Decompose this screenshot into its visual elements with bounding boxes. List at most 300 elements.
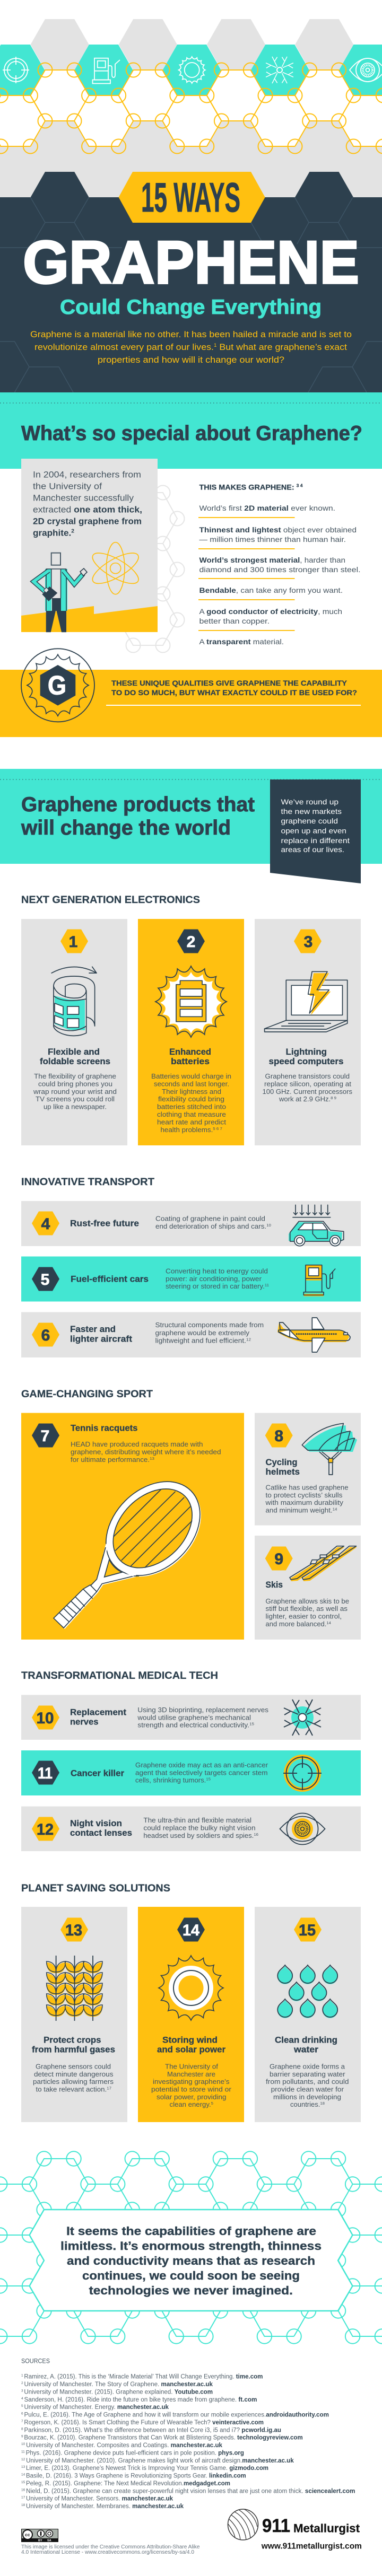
source list: medgadget.com [184, 2481, 230, 2487]
source list: Limer, E. (2013). Graphene’s Newest Trick is Improving Your Tennis Game. [26, 2465, 229, 2472]
card 3: lightning computers [255, 919, 361, 1145]
intro text: 1 [214, 343, 216, 348]
card 9: skis [255, 1536, 361, 1640]
callout text: THESE UNIQUE QUALITIES GIVE GRAPHENE THE CAPABILITY [111, 679, 347, 687]
card body: 100 GHz. Current processors [262, 1088, 352, 1096]
badge 8 [265, 1423, 293, 1448]
card body: 14 [333, 1507, 337, 1512]
badge 5: 5 [41, 1271, 49, 1289]
card 14: storing power [138, 1907, 244, 2122]
card body: wrap round your wrist and [33, 1088, 117, 1096]
source list: 11 [21, 2450, 26, 2454]
discovery text: 2 [71, 528, 74, 535]
card title: Skis [265, 1580, 283, 1590]
card body: countries. [290, 2101, 319, 2108]
card title [32, 2036, 115, 2055]
source list: manchester.ac.uk [171, 2442, 223, 2449]
icon: cc by-sa: SA [47, 2539, 51, 2542]
badge 3: 3 [304, 933, 312, 951]
badge 2 [177, 929, 205, 953]
icon: scientist figure [33, 553, 87, 632]
card body: lighter, easier to control, [265, 1613, 342, 1620]
row body: 16 [254, 1832, 258, 1837]
badge 4 [32, 1211, 59, 1236]
card body: potential to store wind or [151, 2086, 231, 2093]
badge 11: 11 [38, 1765, 53, 1782]
row body [155, 1215, 271, 1230]
row title: Replacement [70, 1708, 127, 1718]
card title: Enhanced [169, 1047, 211, 1057]
source list: University of Manchester. Composites and Coatings. [26, 2442, 171, 2449]
row title: nerves [70, 1717, 99, 1727]
icon: roll-up screen [51, 967, 97, 1036]
row 5: fuel-efficient cars [21, 1257, 361, 1301]
card title [275, 2036, 337, 2055]
icon: water drops [277, 1965, 337, 2018]
source list: 4 [21, 2397, 24, 2400]
card body [265, 1484, 348, 1514]
badge 10 [32, 1705, 59, 1730]
badge 14 [177, 1917, 205, 1942]
card body: clean energy. [170, 2101, 209, 2108]
list items: World’s strongest material , harder than [199, 556, 345, 564]
card title: from harmful gases [32, 2045, 115, 2055]
source list: sciencealert.com [305, 2488, 355, 2494]
card body: millions in developing [273, 2093, 341, 2101]
card body: Graphene allows skis to be [265, 1598, 349, 1605]
wordmark: Metallurgist [293, 2522, 360, 2535]
card title: water [293, 2045, 319, 2055]
row body: 10 [266, 1223, 271, 1228]
card body: batteries stitched into [157, 1103, 226, 1110]
list items: — million times thinner than human hair. [199, 535, 346, 544]
card body: Graphene sensors could [36, 2063, 111, 2071]
source list: Basile, D. (2016). 3 Ways Graphene is Revolutionizing Sports Gear. [26, 2473, 209, 2479]
wordmark [262, 2516, 360, 2536]
row body: headset used by soldiers and spies. [143, 1832, 250, 1839]
card title [157, 2036, 226, 2055]
card title [268, 1047, 344, 1066]
card body: 5 [211, 2101, 213, 2106]
badge 7 [32, 1423, 59, 1448]
source list: Youtube.com [175, 2389, 213, 2395]
badge 9 [265, 1546, 293, 1571]
card 13: protect crops [21, 1907, 127, 2122]
card body: for ultimate performance. [71, 1456, 145, 1464]
source list: 5 [21, 2404, 24, 2408]
card title [169, 1047, 211, 1066]
source list: University of Manchester. Energy. [24, 2404, 117, 2411]
card body: and minimum weight. [265, 1507, 329, 1514]
row body: lightweight and fuel efficient. [155, 1337, 239, 1345]
source list: 9 [21, 2435, 24, 2439]
row title: lighter aircraft [70, 1335, 133, 1344]
card body: 13 [150, 1456, 154, 1461]
intro text: properties and how will it change our world? [98, 355, 284, 365]
source list: University of Manchester. (2015). Graphene explained. [24, 2389, 175, 2395]
row title: contact lenses [70, 1828, 132, 1838]
icon: neuron [284, 1699, 321, 1736]
source list: manchester.ac.uk [242, 2458, 294, 2464]
badge 8: 8 [274, 1427, 283, 1445]
source list: manchester.ac.uk [132, 2503, 184, 2510]
icon: wheat [47, 1956, 102, 2021]
heading: Graphene products that [21, 793, 255, 816]
section heading: electronics: NEXT GENERATION ELECTRONICS [21, 894, 200, 906]
badge 15: 15 [299, 1922, 316, 1939]
source list: linkedin.com [209, 2473, 246, 2479]
badge 7: 7 [41, 1427, 49, 1445]
icon: eye [280, 1813, 325, 1844]
discovery text: the University of [33, 481, 102, 491]
decorative grey lattice [118, 486, 185, 652]
heading [21, 793, 255, 839]
icon: fuel pump [92, 58, 120, 84]
panel: products header [0, 769, 382, 883]
icon: laptop with bolt [265, 971, 348, 1032]
badge 3 [294, 929, 322, 953]
source list: Parkinson, D. (2015). What’s the difference between an Intel Core i3, i5 and i7? [24, 2427, 241, 2433]
list items: A good conductor of electricity , much [199, 607, 342, 616]
row title: Night vision [70, 1819, 122, 1828]
icon: aeroplane [277, 1318, 350, 1352]
badge 6 [32, 1322, 59, 1347]
card title: helmets [265, 1467, 300, 1477]
intro box: the new markets [281, 807, 342, 816]
row body: steering or stored in car battery. [166, 1283, 259, 1290]
card body [33, 2063, 114, 2093]
badge 9: 9 [274, 1550, 283, 1568]
row body: graphene would be extremely [155, 1329, 250, 1337]
row body: Converting heat to energy could [166, 1267, 268, 1275]
source list: 3 [21, 2389, 24, 2393]
badge 10: 10 [36, 1710, 54, 1727]
website: www.911metallurgist.com [261, 2542, 362, 2551]
icon: skis [290, 1546, 357, 1581]
closing text: continues, we could soon be seeing [82, 2269, 300, 2282]
discovery text: graphite. [33, 528, 70, 538]
card body: Catlike has used graphene [265, 1484, 348, 1492]
source list: University of Manchester. The Story of Graphene. [24, 2381, 161, 2388]
source list: ft.com [238, 2397, 257, 2403]
closing text: It seems the capabilities of graphene are [66, 2224, 316, 2238]
card 15: clean water [255, 1907, 361, 2122]
card title: Clean drinking [275, 2036, 337, 2045]
licence text: This image is licensed under the Creative Commons Attribution-Share Alike [21, 2544, 200, 2550]
row body [166, 1267, 269, 1290]
section heading: planet: PLANET SAVING SOLUTIONS [21, 1882, 170, 1894]
badge 13: 13 [65, 1922, 82, 1939]
card body: 5 6 7 [213, 1126, 222, 1131]
icon: logo globe [228, 2509, 258, 2540]
intro box: areas of our lives. [281, 845, 344, 854]
card body: to protect cyclists’ skulls [265, 1492, 343, 1499]
badge 2: 2 [187, 933, 195, 951]
callout text [111, 679, 357, 697]
card body: provide clean water for [271, 2086, 344, 2093]
discovery text: 2D crystal graphene from [33, 516, 142, 526]
badge 14: 14 [183, 1922, 199, 1939]
card body: health problems. [160, 1126, 210, 1134]
source list: 14 [21, 2473, 26, 2477]
card body: Graphene oxide forms a [270, 2063, 345, 2071]
licence text: 4.0 International License - www.creativecommons.org/licenses/by-sa/4.0 [21, 2549, 195, 2555]
badge 13 [60, 1917, 88, 1942]
intro text [30, 330, 352, 365]
source list: Phys. (2016). Graphene device puts fuel-efficient cars in pole position. [26, 2450, 218, 2456]
row 6: aircraft [21, 1312, 361, 1357]
source list: 18 [21, 2503, 26, 2507]
card body: 8 9 [331, 1096, 336, 1100]
source list: pcworld.ig.au [241, 2427, 281, 2433]
row title: Fuel-efficient cars [71, 1275, 149, 1284]
source list: Peleg, R. (2015). Graphene: The Next Medical Revolution. [26, 2481, 184, 2487]
card body: up like a newspaper. [44, 1103, 107, 1110]
source list: 13 [21, 2465, 26, 2469]
row body: could replace the bulky night vision [143, 1824, 256, 1832]
source list: manchester.ac.uk [122, 2496, 173, 2502]
badge 6: 6 [41, 1327, 50, 1344]
badge 12 [32, 1817, 59, 1841]
source list: Bourzac, K. (2010). Graphene Transistors that Can Work at Blistering Speeds. [24, 2435, 237, 2441]
source list: 15 [21, 2481, 26, 2484]
icon: sun burst [179, 57, 205, 83]
intro box [270, 779, 361, 883]
card body: 14 [326, 1620, 331, 1625]
row 10: replacement nerves [21, 1695, 361, 1740]
badge: 15 ways [119, 172, 265, 223]
card body: with maximum durability [265, 1499, 344, 1506]
card body: detect minute dangerous [34, 2071, 114, 2078]
source list [21, 2374, 355, 2510]
intro text: revolutionize almost every part of our lives. [34, 343, 201, 352]
section heading: medical: TRANSFORMATIONAL MEDICAL TECH [21, 1670, 218, 1681]
panel: what's so special header [0, 392, 382, 469]
badge 1 [60, 929, 88, 953]
source list: phys.org [218, 2450, 244, 2456]
icon: fuel pump [303, 1265, 335, 1296]
card body: solar power, providing [157, 2093, 226, 2101]
logo: 911 Metallurgist [228, 2509, 362, 2551]
card body: replace silicon, operating at [264, 1081, 352, 1088]
source list: 2 [21, 2381, 24, 2385]
source list: veinteractive.com [212, 2420, 264, 2426]
badge 15 [294, 1917, 322, 1942]
card body: investigating graphene’s [153, 2078, 229, 2086]
sources heading: SOURCES [21, 2359, 50, 2365]
list heading: THIS MAKES GRAPHENE: [199, 483, 289, 491]
closing text: limitless. It’s enormous strength, thinness [60, 2239, 322, 2253]
icon: tennis racquet [54, 1463, 220, 1629]
icon: battery burst [155, 966, 227, 1037]
row body: would utilise graphene’s mechanical [137, 1714, 251, 1721]
card body [151, 1073, 231, 1134]
row 11: cancer killer [21, 1750, 361, 1795]
badge 1: 1 [69, 933, 77, 951]
source list: Rogerson, K. (2016). Is Smart Clothing the Future of Wearable Tech? [24, 2420, 212, 2426]
row body [135, 1762, 268, 1784]
card body [71, 1441, 221, 1464]
card title [40, 1047, 110, 1066]
row body: strength and electrical conductivity. [137, 1722, 241, 1729]
icon: atom [89, 542, 143, 594]
source list: manchester.ac.uk [117, 2404, 169, 2411]
closing text: technologies we never imagined. [89, 2284, 293, 2297]
source list: Nield, D. (2015). Graphene can create super-powerful night vision lenses that are just one atom thick. [26, 2488, 305, 2494]
source list: gizmodo.com [229, 2465, 268, 2472]
card title: Tennis racquets [71, 1424, 137, 1433]
panel: title block [0, 172, 382, 392]
card title: Protect crops [44, 2036, 101, 2045]
card body: graphene, distributing weight where it’s needed [71, 1449, 221, 1456]
list items: better than copper. [199, 617, 270, 625]
row body: 12 [246, 1337, 251, 1342]
discovery text: In 2004, researchers from [33, 470, 141, 479]
source list: 17 [21, 2496, 26, 2500]
source list: 10 [21, 2442, 26, 2446]
card body: The University of [165, 2063, 219, 2071]
sources [21, 2359, 355, 2510]
icon: neuron [266, 57, 293, 83]
card body: to take relevant action. [36, 2086, 103, 2093]
source list: time.com [236, 2374, 263, 2380]
card title [265, 1458, 300, 1477]
row title [70, 1325, 133, 1344]
card body [266, 2063, 349, 2108]
heading: will change the world [21, 817, 231, 839]
wordmark: 911 [262, 2516, 290, 2536]
icon: target [3, 57, 29, 83]
card body [265, 1598, 349, 1628]
card title: Cycling [265, 1458, 297, 1467]
section heading: transport: INNOVATIVE TRANSPORT [21, 1176, 154, 1188]
panel: property list [198, 483, 361, 646]
card body: and more balanced. [265, 1620, 325, 1628]
row body: 11 [265, 1283, 269, 1287]
card body: HEAD have produced racquets made with [71, 1441, 203, 1448]
panel: closing statement on teal lattice [0, 2151, 382, 2344]
source list: 12 [21, 2458, 26, 2461]
card title: speed computers [268, 1057, 344, 1066]
icon: eye [350, 58, 382, 82]
card body: Batteries would charge in [151, 1073, 231, 1080]
row body [143, 1817, 258, 1839]
list items: Bendable , can take any form you want. [199, 586, 343, 594]
row body: end deterioration of ships and cars. [155, 1223, 260, 1230]
row 4: rust-free future [21, 1201, 361, 1246]
card title: Lightning [285, 1047, 327, 1057]
card title: Flexible and [48, 1047, 100, 1057]
row body: Graphene oxide may act as an anti-cancer [135, 1762, 268, 1769]
licence badge and text [21, 2529, 200, 2555]
icon: G badge [21, 649, 94, 722]
row body: Using 3D bioprinting, replacement nerves [137, 1706, 268, 1714]
card body: from pollutants, and could [266, 2078, 349, 2086]
icon: car under falling arrows [289, 1205, 344, 1246]
panel: unique qualities band [0, 649, 382, 737]
card 7: tennis racquets [21, 1413, 244, 1640]
card body [33, 1073, 117, 1110]
list heading: 3 4 [297, 483, 303, 488]
title: graphene: GRAPHENE [23, 229, 359, 296]
closing text [60, 2224, 322, 2297]
card body: particles allowing farmers [33, 2078, 114, 2086]
card body: could bring phones you [38, 1081, 112, 1088]
row title: Faster and [70, 1325, 116, 1334]
panel: 2004 discovery [21, 459, 158, 632]
list items: World’s first 2D material ever known. [199, 504, 335, 512]
intro text: Graphene is a material like no other. It has been hailed a miracle and is set to [30, 330, 352, 339]
list items: A transparent material. [199, 637, 284, 646]
badge 11 [32, 1760, 59, 1785]
discovery text: Manchester successfully [33, 493, 134, 503]
card title: batteries [171, 1057, 210, 1066]
card body: Graphene transistors could [265, 1073, 350, 1080]
row title [70, 1819, 132, 1838]
row title: Cancer killer [71, 1769, 125, 1778]
subtitle: Could Change Everything [60, 296, 322, 319]
icon: cc by-sa [21, 2529, 58, 2542]
icon: sun [159, 1956, 223, 2020]
row body: cells, shrinking tumors. [135, 1777, 203, 1784]
card body: Manchester are [167, 2071, 215, 2078]
row body: 15 [206, 1777, 211, 1782]
callout text: TO DO SO MUCH, BUT WHAT EXACTLY COULD IT BE USED FOR? [111, 689, 357, 697]
row body: power: air conditioning, power [166, 1275, 262, 1283]
card body: 18 [320, 2101, 325, 2106]
source list: 1 [21, 2374, 24, 2378]
heading: What’s so special about Graphene? [21, 422, 362, 445]
list items [199, 504, 361, 646]
closing text: and conductivity means that as research [67, 2254, 315, 2267]
card 8: cycling helmets [255, 1413, 361, 1526]
card body: heart rate and predict [157, 1119, 227, 1126]
hero: hexagon lattice banner with icons [0, 19, 382, 197]
intro box: graphene could [281, 817, 338, 825]
icon: G badge: G [48, 670, 66, 700]
card body [262, 1073, 352, 1103]
icon: cc by-sa: BY [38, 2539, 42, 2542]
card 1: flexible screens [21, 919, 127, 1145]
source list: University of Manchester. Sensors. [26, 2496, 122, 2502]
row body: agent that selectively targets cancer stem [135, 1769, 268, 1776]
card body: 17 [107, 2086, 111, 2091]
row body: The ultra-thin and flexible material [143, 1817, 251, 1824]
discovery text: extracted one atom thick, [33, 505, 142, 514]
source list: Pulcu, E. (2016). The Age of Graphene and how it will transform our mobile experiences. [24, 2412, 266, 2418]
section heading: sport: GAME-CHANGING SPORT [21, 1388, 153, 1400]
source list: University of Manchester. Membranes. [26, 2503, 132, 2510]
row body: 15 [249, 1722, 254, 1727]
source list: Sanderson, H. (2016). Ride into the future on bike tyres made from graphene. [24, 2397, 238, 2403]
intro box: open up and even [281, 826, 346, 835]
source list: 16 [21, 2488, 26, 2492]
card body: seconds and last longer. [154, 1081, 229, 1088]
card 2: enhanced batteries [138, 919, 244, 1145]
card title: foldable screens [40, 1057, 110, 1066]
card body: Their lightness and [162, 1088, 221, 1096]
list items: Thinnest and lightest object ever obtained [199, 525, 357, 534]
row body: Coating of graphene in paint could [155, 1215, 265, 1223]
source list: 7 [21, 2420, 24, 2423]
icon: helmet [302, 1423, 357, 1475]
icon: cc by-sa: cc [25, 2532, 30, 2537]
card body: barrier separating water [270, 2071, 345, 2078]
row body [137, 1706, 268, 1729]
discovery text [33, 470, 142, 538]
source list: androidauthority.com [266, 2412, 329, 2418]
row 12: night vision [21, 1807, 361, 1851]
